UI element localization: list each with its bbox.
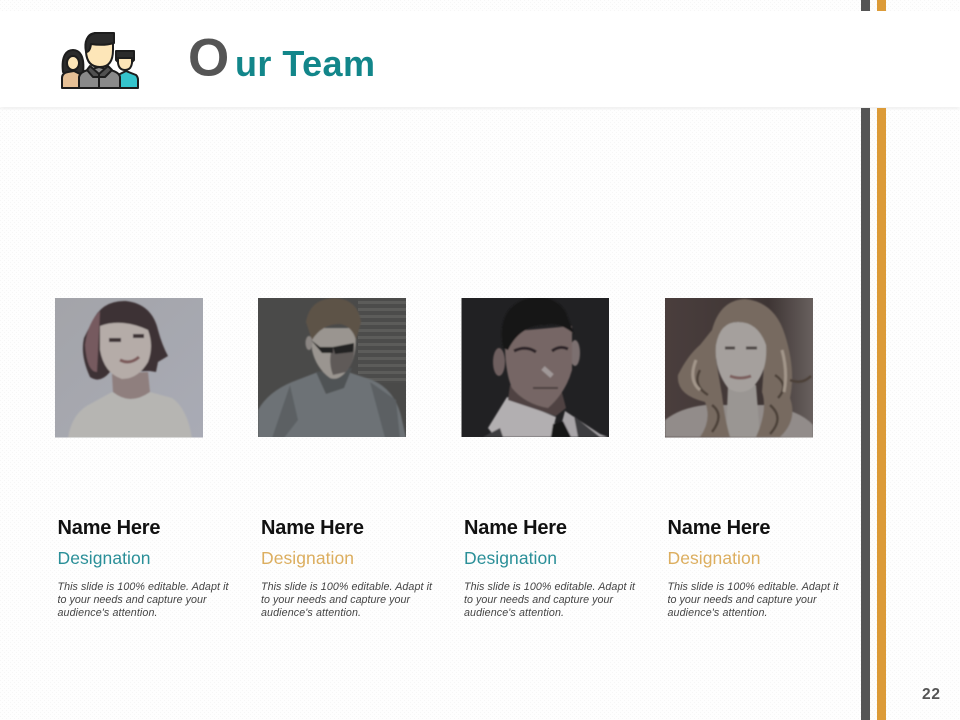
team member 2 text: Designation — [261, 548, 354, 568]
team member 3 text: audience's attention. — [464, 607, 564, 619]
vertical accent bars — [861, 0, 886, 720]
header band — [0, 11, 960, 109]
team member 3 text: Designation — [464, 548, 557, 568]
team member 2 text: to your needs and capture your — [261, 594, 410, 606]
team member 1 text: to your needs and capture your — [58, 594, 207, 606]
team member 4 text: Name Here — [668, 517, 770, 539]
photo: man in collar and tie — [462, 297, 609, 437]
team member 4 text: audience's attention. — [668, 607, 768, 619]
photo: man with glasses — [258, 298, 406, 438]
team member 3 text: Name Here — [464, 517, 567, 539]
icon: team of three people — [62, 33, 138, 88]
team member 1 text — [58, 517, 230, 619]
title — [188, 28, 375, 88]
team member 1 text: This slide is 100% editable. Adapt it — [58, 581, 230, 593]
team member 2 text: Name Here — [261, 517, 364, 539]
team member 3 text: to your needs and capture your — [464, 594, 613, 606]
team member 4 text: This slide is 100% editable. Adapt it — [668, 581, 840, 593]
team member 2 text — [261, 517, 433, 619]
team member 3 text — [464, 517, 636, 619]
photo: woman with long curly hair — [665, 298, 813, 438]
team member 4 text — [668, 517, 840, 619]
team member 4 text: Designation — [668, 548, 760, 568]
team member 3 text: This slide is 100% editable. Adapt it — [464, 581, 636, 593]
title: ur Team — [235, 43, 375, 84]
team member 1 text: Designation — [58, 548, 150, 568]
page number: 22 — [922, 686, 940, 703]
photo: woman with short hair — [55, 298, 203, 438]
team member 2 text: audience's attention. — [261, 607, 361, 619]
team member 2 text: This slide is 100% editable. Adapt it — [261, 581, 433, 593]
team member 1 text: audience's attention. — [58, 607, 158, 619]
team member 4 text: to your needs and capture your — [668, 594, 817, 606]
title: O — [188, 28, 229, 88]
team member 1 text: Name Here — [58, 517, 160, 539]
